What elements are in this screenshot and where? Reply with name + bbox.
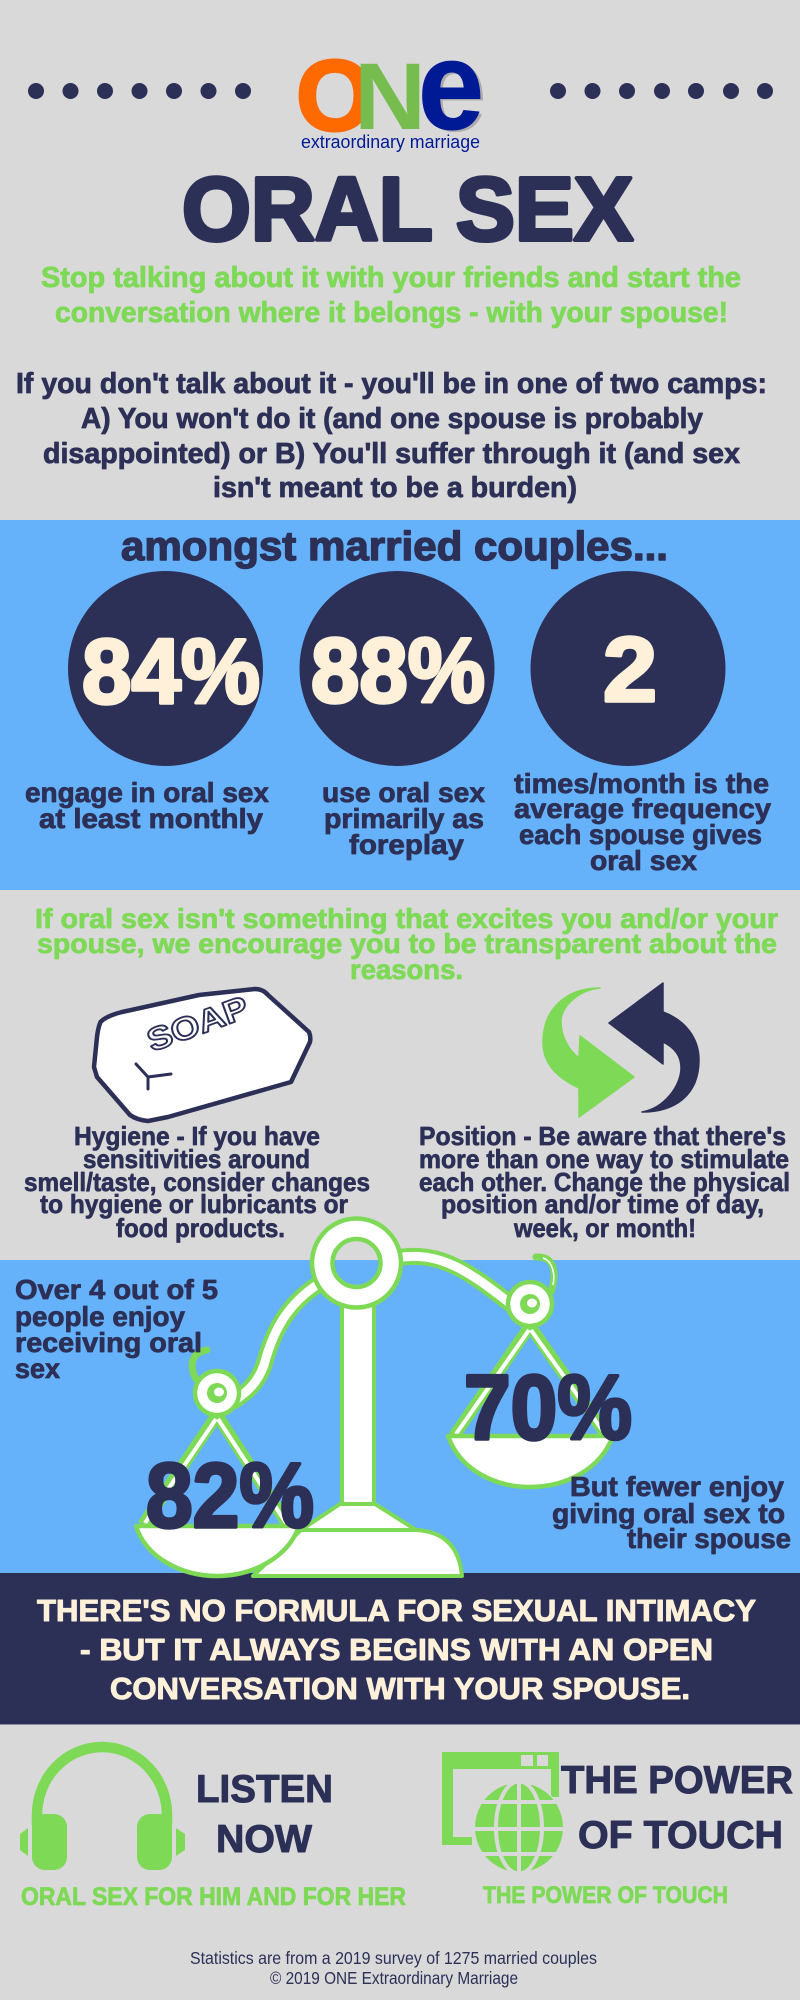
- stat: 2 times per month: average frequency: [514, 793, 771, 824]
- panel: closing statement: [0, 1573, 800, 1725]
- icon: swap arrows: [543, 983, 699, 1117]
- footer: © 2019 ONE Extraordinary Marriage: [270, 1968, 518, 1988]
- hygiene text: [24, 1121, 370, 1243]
- hygiene text: food products.: [116, 1213, 285, 1243]
- intro paragraph: If you don't talk about it - you'll be in one of two camps:: [16, 368, 767, 400]
- panel: closing statement: CONVERSATION WITH YOUR SPOUSE.: [110, 1671, 690, 1706]
- giving text: [552, 1471, 791, 1554]
- stat: 84%: at least monthly: [39, 803, 263, 834]
- hygiene text: Hygiene - If you have: [74, 1121, 320, 1151]
- right beam: [396, 1256, 512, 1305]
- green reasons heading: [35, 903, 778, 985]
- panel: resources: [20, 1747, 793, 1911]
- right chains: [454, 1326, 607, 1436]
- footer: Statistics are from a 2019 survey of 1275 married couples: [190, 1948, 597, 1968]
- podcast link text: ORAL SEX FOR HIM AND FOR HER: [21, 1883, 406, 1911]
- position text: [419, 1121, 790, 1243]
- decorative dots right: [550, 83, 773, 99]
- green reasons heading: If oral sex isn't something that excites you and/or your: [35, 903, 778, 934]
- green reasons heading: reasons.: [350, 954, 463, 985]
- hygiene text: sensitivities around: [83, 1144, 310, 1174]
- stat: 88%: [300, 571, 494, 860]
- right hook and ring: [536, 1257, 554, 1292]
- the power of touch label: [561, 1759, 793, 1857]
- stat: 70%: 70%: [464, 1357, 632, 1459]
- logo: e: [421, 19, 487, 158]
- logo: [296, 17, 487, 158]
- hygiene text: smell/taste, consider changes: [24, 1167, 370, 1197]
- icon: balance scale: [136, 1218, 613, 1576]
- green intro text: conversation where it belongs - with your spouse!: [55, 297, 728, 329]
- logo: e: [418, 17, 484, 156]
- icon: soap bar: SOAP: [142, 989, 253, 1059]
- giving text: giving oral sex to: [552, 1498, 785, 1529]
- article link text: THE POWER OF TOUCH: [483, 1882, 728, 1909]
- green reasons heading: spouse, we encourage you to be transparent about the: [37, 928, 777, 959]
- left beam: [232, 1283, 320, 1402]
- listen now label: LISTEN: [196, 1768, 333, 1811]
- stat: 88%: primarily as: [324, 803, 484, 834]
- icon: headphones: [20, 1747, 185, 1870]
- position text: Position - Be aware that there's: [419, 1121, 786, 1151]
- logo: O: [296, 40, 374, 152]
- listen now label: NOW: [216, 1818, 312, 1861]
- intro paragraph: A) You won't do it (and one spouse is probably: [81, 403, 703, 435]
- receiving text: receiving oral: [15, 1327, 202, 1358]
- green intro text: Stop talking about it with your friends and start the: [41, 262, 741, 294]
- giving text: But fewer enjoy: [570, 1471, 784, 1502]
- stat: 2 times per month: each spouse gives: [519, 819, 762, 850]
- icon: web globe window: [442, 1752, 568, 1875]
- panel: closing statement: THERE'S NO FORMULA FOR SEXUAL INTIMACY: [37, 1593, 756, 1628]
- stat: 88%: foreplay: [349, 829, 464, 860]
- receiving text: Over 4 out of 5: [15, 1274, 218, 1305]
- right pan: [448, 1436, 613, 1487]
- stat: 2 times per month: 2: [603, 619, 657, 721]
- panel: enjoyment comparison: [0, 1218, 800, 1576]
- the power of touch label: THE POWER: [561, 1759, 793, 1802]
- giving text: their spouse: [627, 1523, 791, 1554]
- position text: more than one way to stimulate: [419, 1144, 789, 1174]
- green intro text: [41, 262, 741, 329]
- icon: soap bar: [94, 989, 310, 1121]
- statistics heading: amongst married couples...: [121, 523, 668, 569]
- left hook and ring: [192, 1350, 207, 1379]
- stat: 84%: 84%: [82, 621, 260, 723]
- stat: 88%: use oral sex: [322, 777, 485, 808]
- panel: transparency reasons: [24, 903, 790, 1243]
- stat: 82%: 82%: [146, 1445, 314, 1547]
- intro paragraph: isn't meant to be a burden): [213, 472, 577, 504]
- footer: [190, 1948, 597, 1988]
- logo: extraordinary marriage: [301, 132, 480, 152]
- panel: closing statement: - BUT IT ALWAYS BEGINS WITH AN OPEN: [80, 1632, 713, 1667]
- stat: 84%: [25, 571, 269, 834]
- hygiene text: to hygiene or lubricants or: [40, 1189, 348, 1219]
- left chains: [143, 1415, 288, 1525]
- header: [16, 17, 773, 504]
- intro paragraph: [16, 368, 767, 504]
- listen now label: [196, 1768, 333, 1861]
- panel: statistics: [0, 520, 800, 890]
- stat: 88%: 88%: [311, 620, 485, 722]
- stat: 2 times per month: times/month is the: [514, 768, 769, 799]
- scale base: [253, 1530, 462, 1576]
- stat: 2 times per month: [514, 571, 771, 876]
- logo: N: [354, 44, 426, 150]
- intro paragraph: disappointed) or B) You'll suffer through it (and sex: [43, 438, 740, 470]
- title: ORAL SEX: [182, 160, 633, 260]
- receiving text: sex: [15, 1353, 60, 1384]
- central ring: [322, 1228, 392, 1298]
- stat: 84%: engage in oral sex: [25, 777, 269, 808]
- decorative dots left: [28, 83, 251, 99]
- stat: 2 times per month: oral sex: [590, 845, 697, 876]
- position text: week, or month!: [513, 1213, 696, 1243]
- the power of touch label: OF TOUCH: [578, 1814, 783, 1857]
- receiving text: [15, 1274, 218, 1384]
- left pan: [136, 1526, 299, 1576]
- position text: position and/or time of day,: [441, 1189, 764, 1219]
- receiving text: people enjoy: [15, 1301, 185, 1332]
